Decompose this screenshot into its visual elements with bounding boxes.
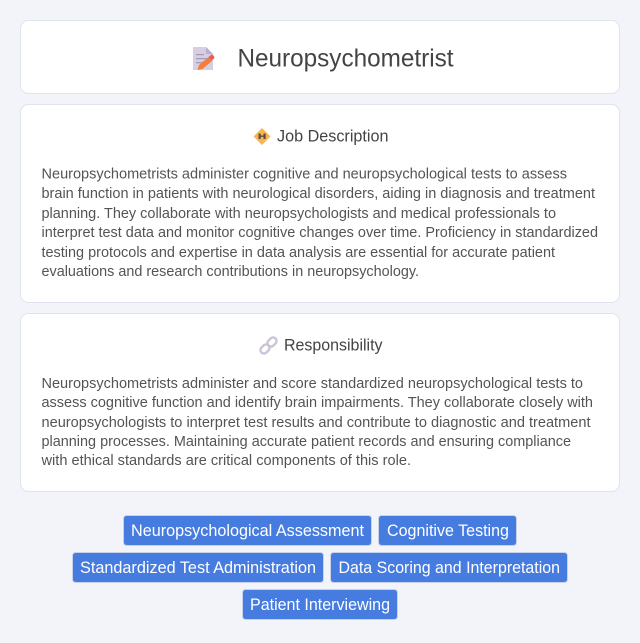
title: Neuropsychometrist [238, 44, 454, 72]
text block: job description: planning. They collaborate with neuropsychologists and medical professionals to [42, 206, 556, 222]
text block: job description: brain function in patients with neurological disorders, aiding in diagnosis and treatment [42, 186, 595, 202]
text block: responsibility: Neuropsychometrists administer and score standardized neuropsychological tests to [42, 376, 583, 392]
icon: diamond sign [254, 128, 270, 145]
tag: neuropsychological assessment: Neuropsychological Assessment [131, 521, 364, 540]
heading: job description: Job Description [277, 128, 388, 146]
tag: cognitive testing [378, 516, 516, 546]
icon: chain link [259, 336, 278, 355]
tag: neuropsychological assessment [124, 516, 372, 546]
text block: responsibility: planning processes. Maintaining accurate patient records and ensuring compliance [42, 434, 571, 450]
icon: document with pencil [193, 47, 214, 70]
text block: responsibility: with ethical standards are critical components of this role. [41, 453, 411, 469]
panel: responsibility [20, 314, 620, 492]
panel: title header [20, 20, 620, 94]
text block: responsibility: assess cognitive function and identify brain impairments. They collaborate closely with [42, 395, 593, 411]
skill tags [72, 516, 568, 620]
text block: responsibility [41, 376, 593, 469]
tag: data scoring and interpretation [330, 552, 568, 582]
tag: standardized test administration: Standardized Test Administration [80, 558, 316, 577]
heading: responsibility: Responsibility [284, 336, 383, 354]
text block: job description [42, 166, 598, 280]
text block: job description: testing protocols and expertise in data analysis are essential for accurate patient [42, 245, 555, 261]
tag: patient interviewing [242, 590, 398, 620]
text block: job description: Neuropsychometrists administer cognitive and neuropsychological tests to assess [42, 166, 567, 182]
tag: standardized test administration [72, 552, 324, 582]
text block: job description: interpret test data and monitor cognitive changes over time. Proficiency in standardized [42, 225, 598, 241]
tag: patient interviewing: Patient Interviewing [250, 595, 390, 614]
tag: data scoring and interpretation: Data Scoring and Interpretation [338, 558, 560, 577]
tag: cognitive testing: Cognitive Testing [387, 521, 509, 540]
panel: job description [20, 104, 620, 302]
text block: job description: evaluations and research contributions in neuropsychology. [42, 264, 419, 280]
text block: responsibility: neuropsychologists to interpret test results and contribute to diagnostic and treatment [42, 415, 590, 431]
